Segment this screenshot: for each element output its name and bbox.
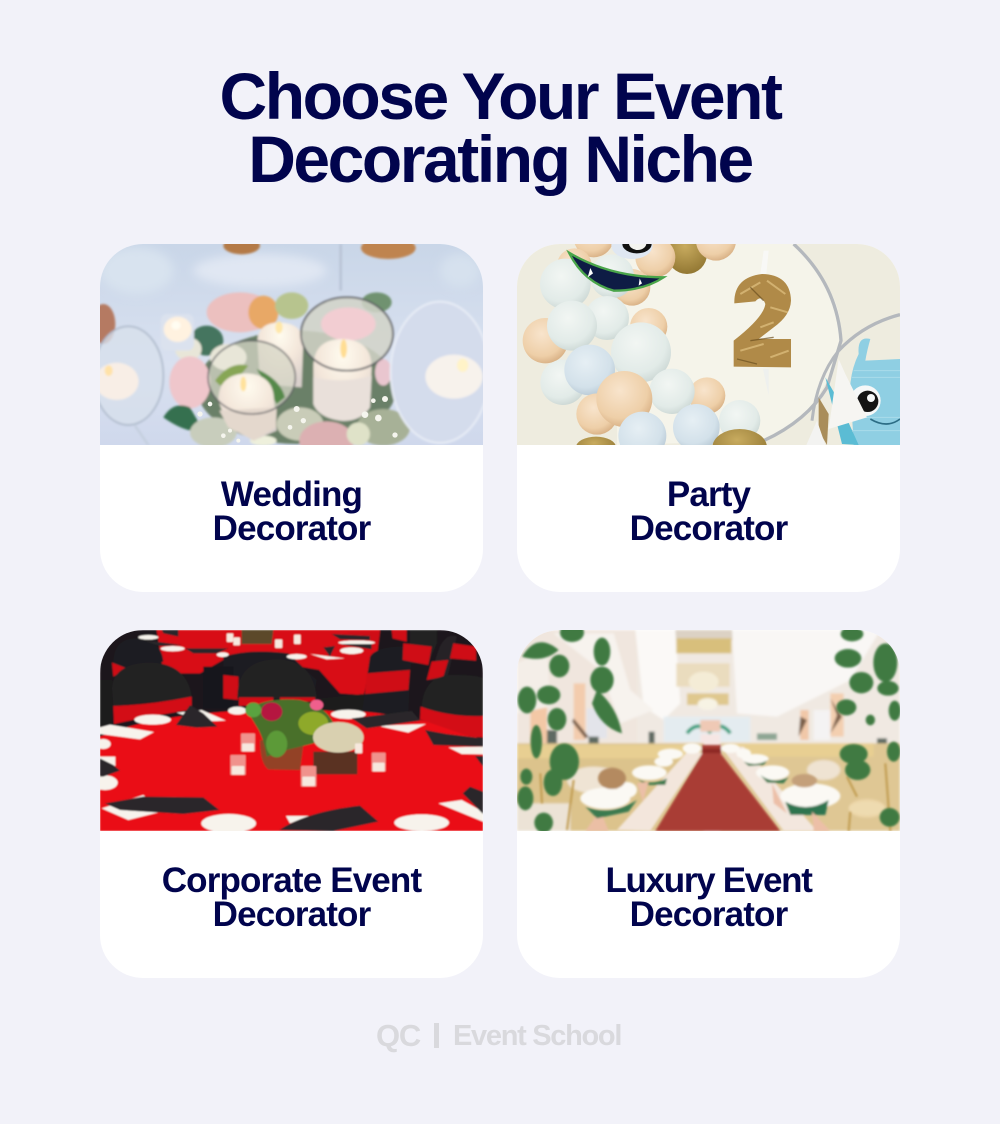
flowers xyxy=(197,331,397,444)
title xyxy=(219,59,782,196)
monster mouth xyxy=(569,253,664,291)
left wine glass xyxy=(93,326,163,425)
image: balloons and number two xyxy=(517,244,900,445)
panel: wedding decorator xyxy=(100,244,483,592)
flames xyxy=(240,377,246,391)
centerpiece xyxy=(260,740,303,770)
tea light xyxy=(161,314,194,351)
label xyxy=(162,861,422,934)
aisle xyxy=(655,745,780,831)
front table xyxy=(100,709,483,831)
image: candles and flowers xyxy=(100,244,483,445)
label xyxy=(605,861,812,934)
blue monster xyxy=(850,338,900,445)
gold chairs band xyxy=(517,743,704,831)
label: Corporate Event xyxy=(162,861,421,900)
label: Decorator xyxy=(213,895,370,934)
chandelier xyxy=(676,638,731,653)
title: Choose Your Event xyxy=(219,59,781,133)
monster eye xyxy=(611,232,653,259)
back table xyxy=(157,630,380,695)
number two candle xyxy=(760,251,769,274)
aisle flowers right xyxy=(721,747,817,831)
image: luxury aisle hall xyxy=(517,630,900,831)
right chair xyxy=(850,802,884,815)
decor xyxy=(572,698,842,738)
votive candles xyxy=(230,733,386,787)
label: Luxury Event xyxy=(605,861,812,900)
panel: party decorator xyxy=(517,244,900,592)
label xyxy=(630,475,788,548)
logo: QC Event School: QC xyxy=(376,1018,420,1053)
place settings xyxy=(92,635,483,833)
plate and hoop xyxy=(617,244,841,445)
panel: luxury event decorator xyxy=(517,630,900,978)
label: Party xyxy=(667,475,750,514)
front chairs xyxy=(112,659,483,727)
stage xyxy=(664,717,750,742)
right bowl glass xyxy=(391,302,489,443)
label xyxy=(213,475,371,548)
aisle flowers left xyxy=(617,748,702,831)
label: Decorator xyxy=(630,509,787,548)
back candle xyxy=(257,322,303,387)
drapes xyxy=(635,630,680,720)
logo: QC Event School: Event School xyxy=(453,1020,621,1052)
panel: corporate event decorator xyxy=(100,630,483,978)
title: Decorating Niche xyxy=(248,122,752,196)
back chairs xyxy=(113,630,457,713)
balloons xyxy=(523,217,767,466)
napkins xyxy=(100,630,483,831)
image: red table setting xyxy=(100,630,483,831)
tassel xyxy=(825,377,859,445)
label: Decorator xyxy=(213,509,370,548)
front left glass xyxy=(208,341,295,414)
logo: QC Event School xyxy=(376,1018,621,1053)
foreground leaves xyxy=(517,623,901,833)
label: Wedding xyxy=(221,475,362,514)
right glass xyxy=(301,297,393,371)
label: Decorator xyxy=(630,895,787,934)
